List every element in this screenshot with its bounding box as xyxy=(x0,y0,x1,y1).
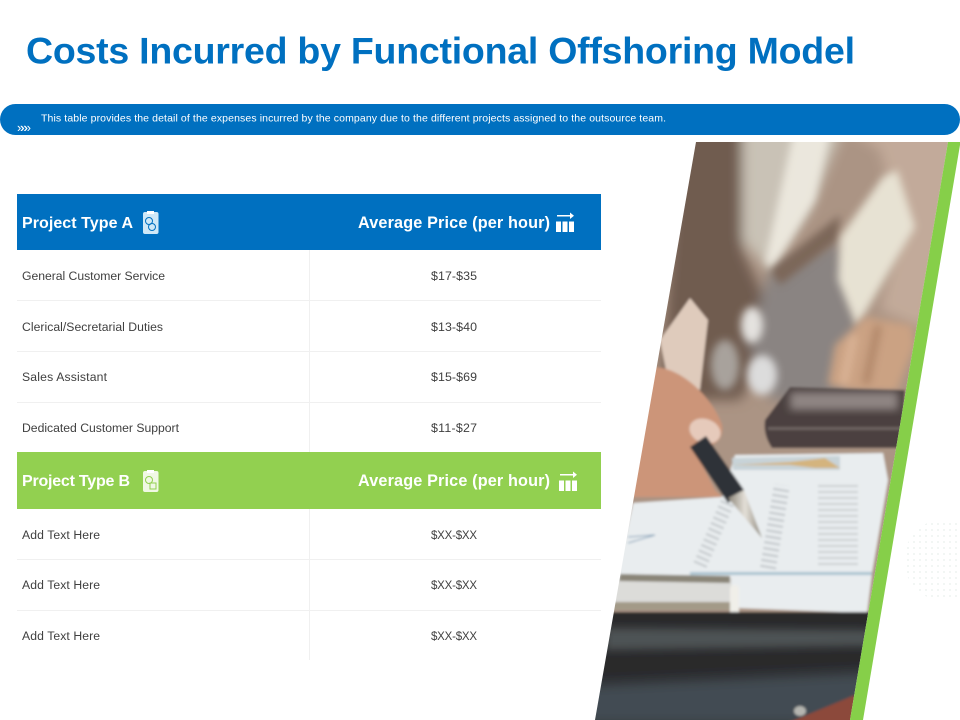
calculator xyxy=(765,387,905,448)
header: project type A: Project Type A xyxy=(22,215,133,232)
lapel xyxy=(838,170,915,327)
rows B: $XX-$XX xyxy=(431,631,477,643)
rows A: Dedicated Customer Support xyxy=(22,421,180,435)
rows A: $13-$40 xyxy=(431,320,477,334)
rows B: Add Text Here xyxy=(22,528,100,542)
binder clip xyxy=(615,572,741,614)
rows B: Add Text Here xyxy=(22,629,100,643)
header: project type A: Average Price (per hour) xyxy=(358,214,550,232)
blurred shirt highlights xyxy=(711,307,777,395)
left hand xyxy=(630,298,724,497)
rows B: Add Text Here xyxy=(22,578,100,592)
rows A: $15-$69 xyxy=(431,370,477,384)
icon: bar chart arrow xyxy=(556,212,574,232)
rows A: Clerical/Secretarial Duties xyxy=(22,320,163,334)
green diagonal band xyxy=(850,142,960,720)
banner text: This table provides the detail of the expenses incurred by the company due to the different projects assigned to the outsource team. xyxy=(41,112,666,124)
rows B xyxy=(17,509,601,660)
dark binder xyxy=(585,612,875,720)
rows A xyxy=(17,250,601,452)
rows B: $XX-$XX xyxy=(431,530,477,542)
rows B: $XX-$XX xyxy=(431,580,477,592)
icon: bar chart arrow xyxy=(559,472,577,491)
title: Costs Incurred by Functional Offshoring Model xyxy=(26,30,855,72)
dotted decorative circle xyxy=(904,519,960,601)
header: project type B: Average Price (per hour) xyxy=(358,472,550,490)
header: project type B: Project Type B xyxy=(22,473,130,490)
rows A: General Customer Service xyxy=(22,269,165,283)
pen xyxy=(690,436,762,538)
icon: chevrons: »»» xyxy=(17,120,31,135)
right hand xyxy=(828,317,915,395)
rows A: $11-$27 xyxy=(431,421,477,435)
subtitle banner xyxy=(0,104,960,135)
rows A: $17-$35 xyxy=(431,269,477,283)
paper document xyxy=(610,453,888,613)
header: project type B xyxy=(17,452,601,509)
photo panel xyxy=(595,142,948,720)
icon: clipboard xyxy=(143,211,158,234)
rows A: Sales Assistant xyxy=(22,370,108,384)
table xyxy=(17,194,601,660)
icon: clipboard xyxy=(143,470,158,492)
header: project type A xyxy=(17,194,601,250)
